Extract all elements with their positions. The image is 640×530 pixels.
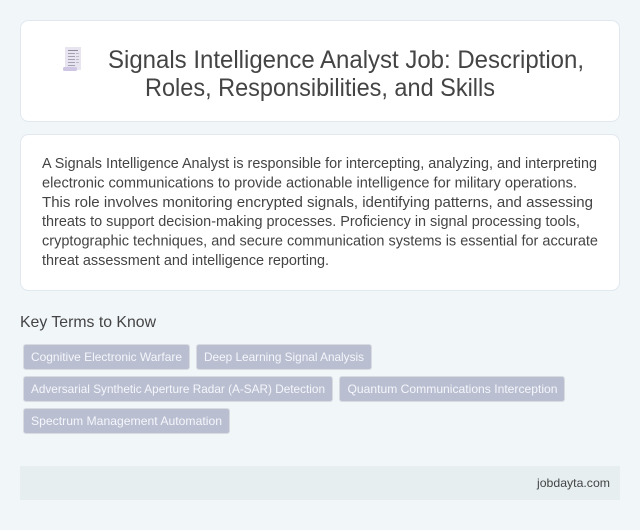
- text block: description: threats to support decision-making processes. Proficiency in signal processing tools,: [42, 214, 580, 230]
- footer: [20, 466, 620, 500]
- heading: key terms: Key Terms to Know: [20, 314, 156, 331]
- text block: description: This role involves monitoring encrypted signals, identifying patterns, and assessing: [42, 195, 593, 211]
- title: Roles, Responsibilities, and Skills: [145, 74, 495, 102]
- tag: quantum communications interception: Quantum Communications Interception: [348, 382, 558, 396]
- text block: description: [42, 156, 598, 269]
- text block: description: A Signals Intelligence Analyst is responsible for intercepting, analyzing, and interpreting: [42, 156, 597, 172]
- tag: deep learning signal analysis: [196, 344, 372, 370]
- text block: description: cryptographic techniques, and secure communication systems is essential for accurate: [42, 234, 598, 250]
- tag list: [24, 344, 564, 434]
- tag: cognitive electronic warfare: [24, 344, 190, 370]
- icon: document scroll: [63, 47, 81, 71]
- text block: description: electronic communications to provide actionable intelligence for military operations.: [42, 175, 577, 191]
- tag: adversarial SAR detection: Adversarial Synthetic Aperture Radar (A-SAR) Detection: [31, 382, 325, 396]
- tag: spectrum management automation: [24, 408, 230, 434]
- tag: deep learning signal analysis: Deep Learning Signal Analysis: [204, 350, 364, 364]
- tag: spectrum management automation: Spectrum Management Automation: [31, 414, 222, 428]
- text block: description: threat assessment and intelligence reporting.: [42, 253, 329, 269]
- tag: adversarial SAR detection: [24, 376, 332, 402]
- title: Signals Intelligence Analyst Job: Description,: [108, 46, 584, 74]
- title: [108, 46, 584, 102]
- footer: jobdayta.com: [536, 476, 610, 490]
- panel: description: [20, 134, 620, 290]
- panel: title header: [20, 20, 620, 122]
- tag: quantum communications interception: [340, 376, 564, 402]
- tag: cognitive electronic warfare: Cognitive Electronic Warfare: [31, 350, 182, 364]
